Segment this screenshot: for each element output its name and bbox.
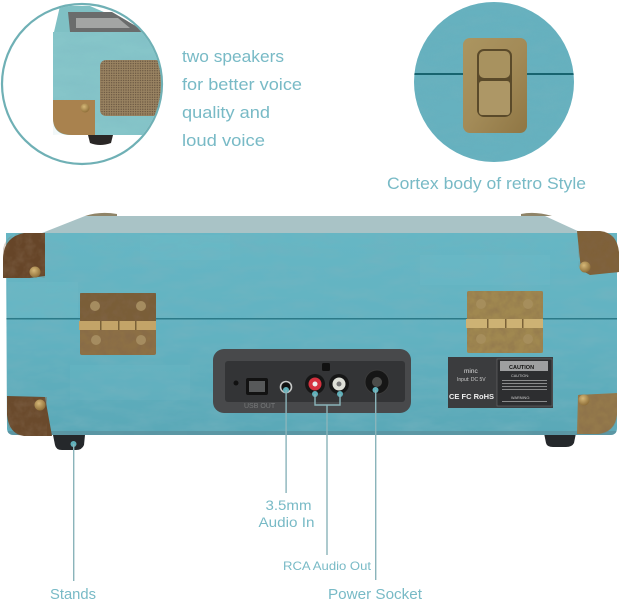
connector panel: USB OUT (244, 403, 276, 410)
icon: red RCA jack (305, 374, 325, 394)
icon: white RCA jack (329, 374, 349, 394)
panel: speaker detail circle (2, 4, 170, 164)
label: 3.5mm audio in: 3.5mm (266, 497, 312, 513)
rating label (448, 357, 553, 408)
text: speaker description: two speakers (182, 47, 284, 66)
icon: rivet (80, 104, 90, 112)
icon: small switch (322, 363, 330, 371)
connector panel (213, 349, 411, 413)
icon: speaker grille (100, 60, 162, 116)
rating label: CE FC RoHS (449, 392, 494, 401)
arrow: power socket leader (372, 387, 378, 580)
icon: optical port (246, 378, 268, 395)
arrow: RCA out leader (312, 391, 343, 555)
arrow: stands leader (70, 441, 76, 581)
icon: power socket (365, 370, 389, 394)
panel: latch detail circle (414, 2, 574, 162)
case top face (42, 216, 582, 233)
label: RCA audio out: RCA Audio Out (283, 559, 372, 573)
label: 3.5mm audio in (258, 497, 314, 530)
icon: indicator dot (234, 380, 238, 386)
arrow: audio in leader (283, 387, 289, 493)
rating label: Input: DC 5V (457, 377, 486, 383)
panel: turntable case rear view (3, 213, 619, 450)
text: body caption: Cortex body of retro Style (387, 175, 586, 193)
text: speaker description (182, 47, 302, 150)
text: speaker description: quality and (182, 103, 270, 122)
rating label: CAUTION (509, 365, 534, 371)
left hinge (79, 293, 156, 355)
rating label: WARNING: (511, 396, 530, 400)
corners (3, 231, 619, 436)
rating label: CAUTION: (511, 374, 529, 378)
text: speaker description: for better voice (182, 75, 302, 94)
rating label: minc (464, 368, 478, 375)
icon: rubber foot (88, 135, 113, 145)
label: 3.5mm audio in: Audio In (258, 514, 314, 530)
icon: brass latch (463, 38, 527, 133)
icon: 3.5mm jack (280, 382, 292, 392)
rubber feet (53, 433, 576, 450)
text: speaker description: loud voice (182, 131, 265, 150)
right hinge (466, 291, 543, 353)
case front (5, 233, 618, 436)
